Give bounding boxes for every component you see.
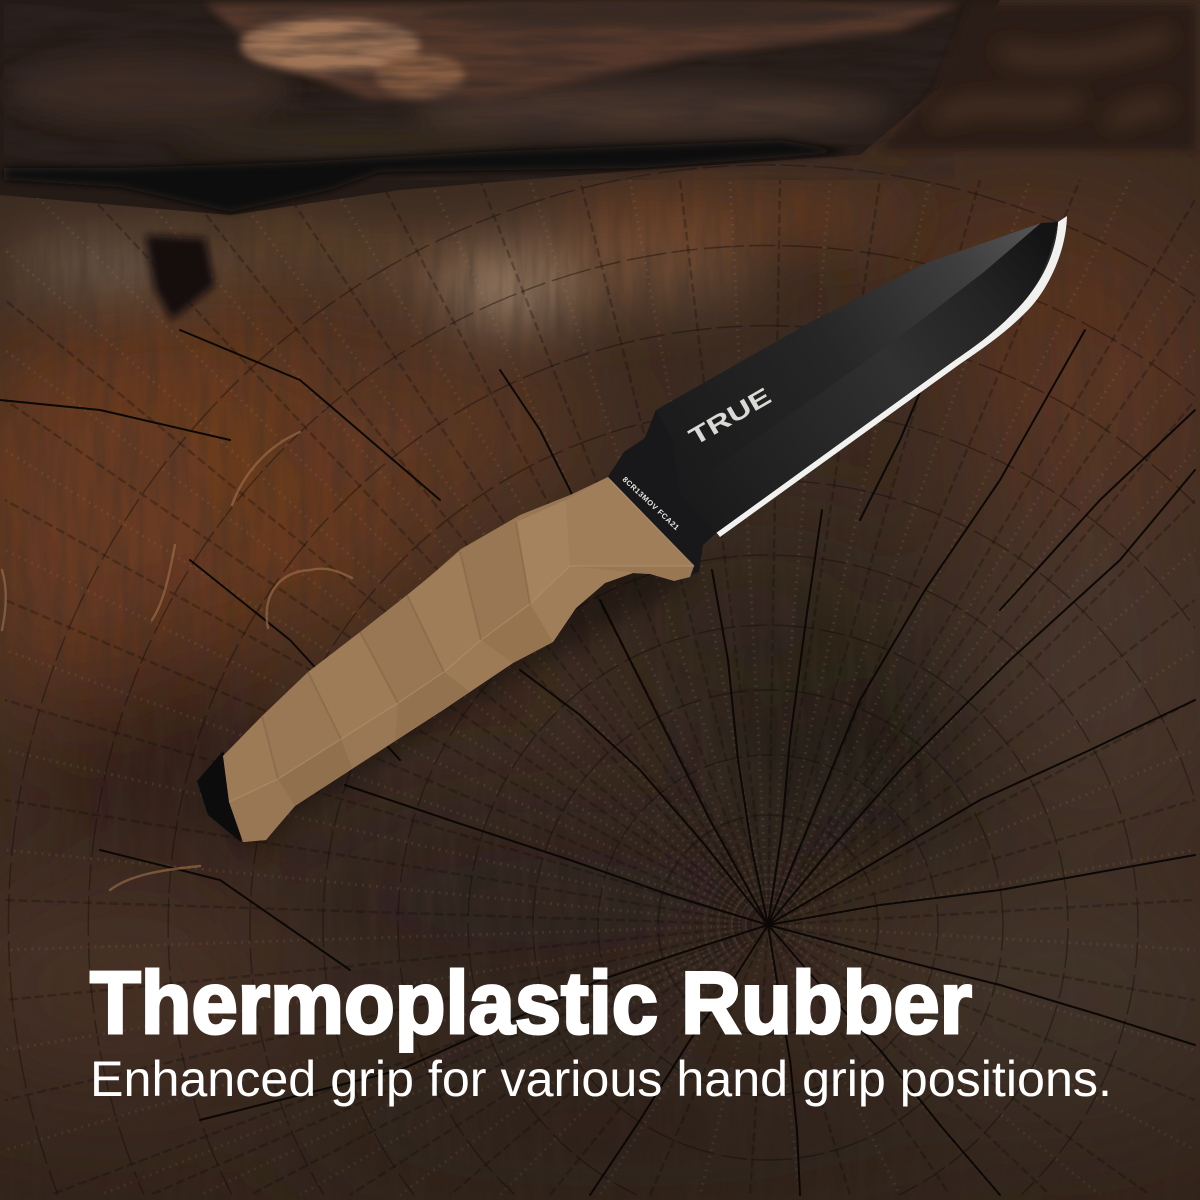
blade [606,216,1067,576]
handle [223,477,694,842]
blurred background top right [880,4,1196,150]
engraved brand: TRUE [684,383,776,451]
blade lower bevel [679,222,1058,533]
blade white edge [716,216,1067,537]
subtitle: Enhanced grip for various hand grip positions. [90,1051,1112,1107]
grip facets [566,477,694,566]
blade body [606,222,1058,576]
blade ricasso [606,410,716,576]
knife shadow [205,490,700,850]
log end grain [205,4,960,100]
steel marking: 8CR13MOV FCA21 [621,475,681,532]
blade upper flat [645,223,1041,493]
title: Thermoplastic Rubber [90,953,972,1052]
bottom text shade [0,940,1200,1200]
grip highlight ridges [229,480,694,802]
dry root fibres [2,432,352,890]
pommel [197,751,241,842]
radial cracks [0,330,1195,1195]
cut log and bark at top [0,0,1000,320]
dark gap beneath log [4,140,850,212]
knife [197,216,1067,850]
